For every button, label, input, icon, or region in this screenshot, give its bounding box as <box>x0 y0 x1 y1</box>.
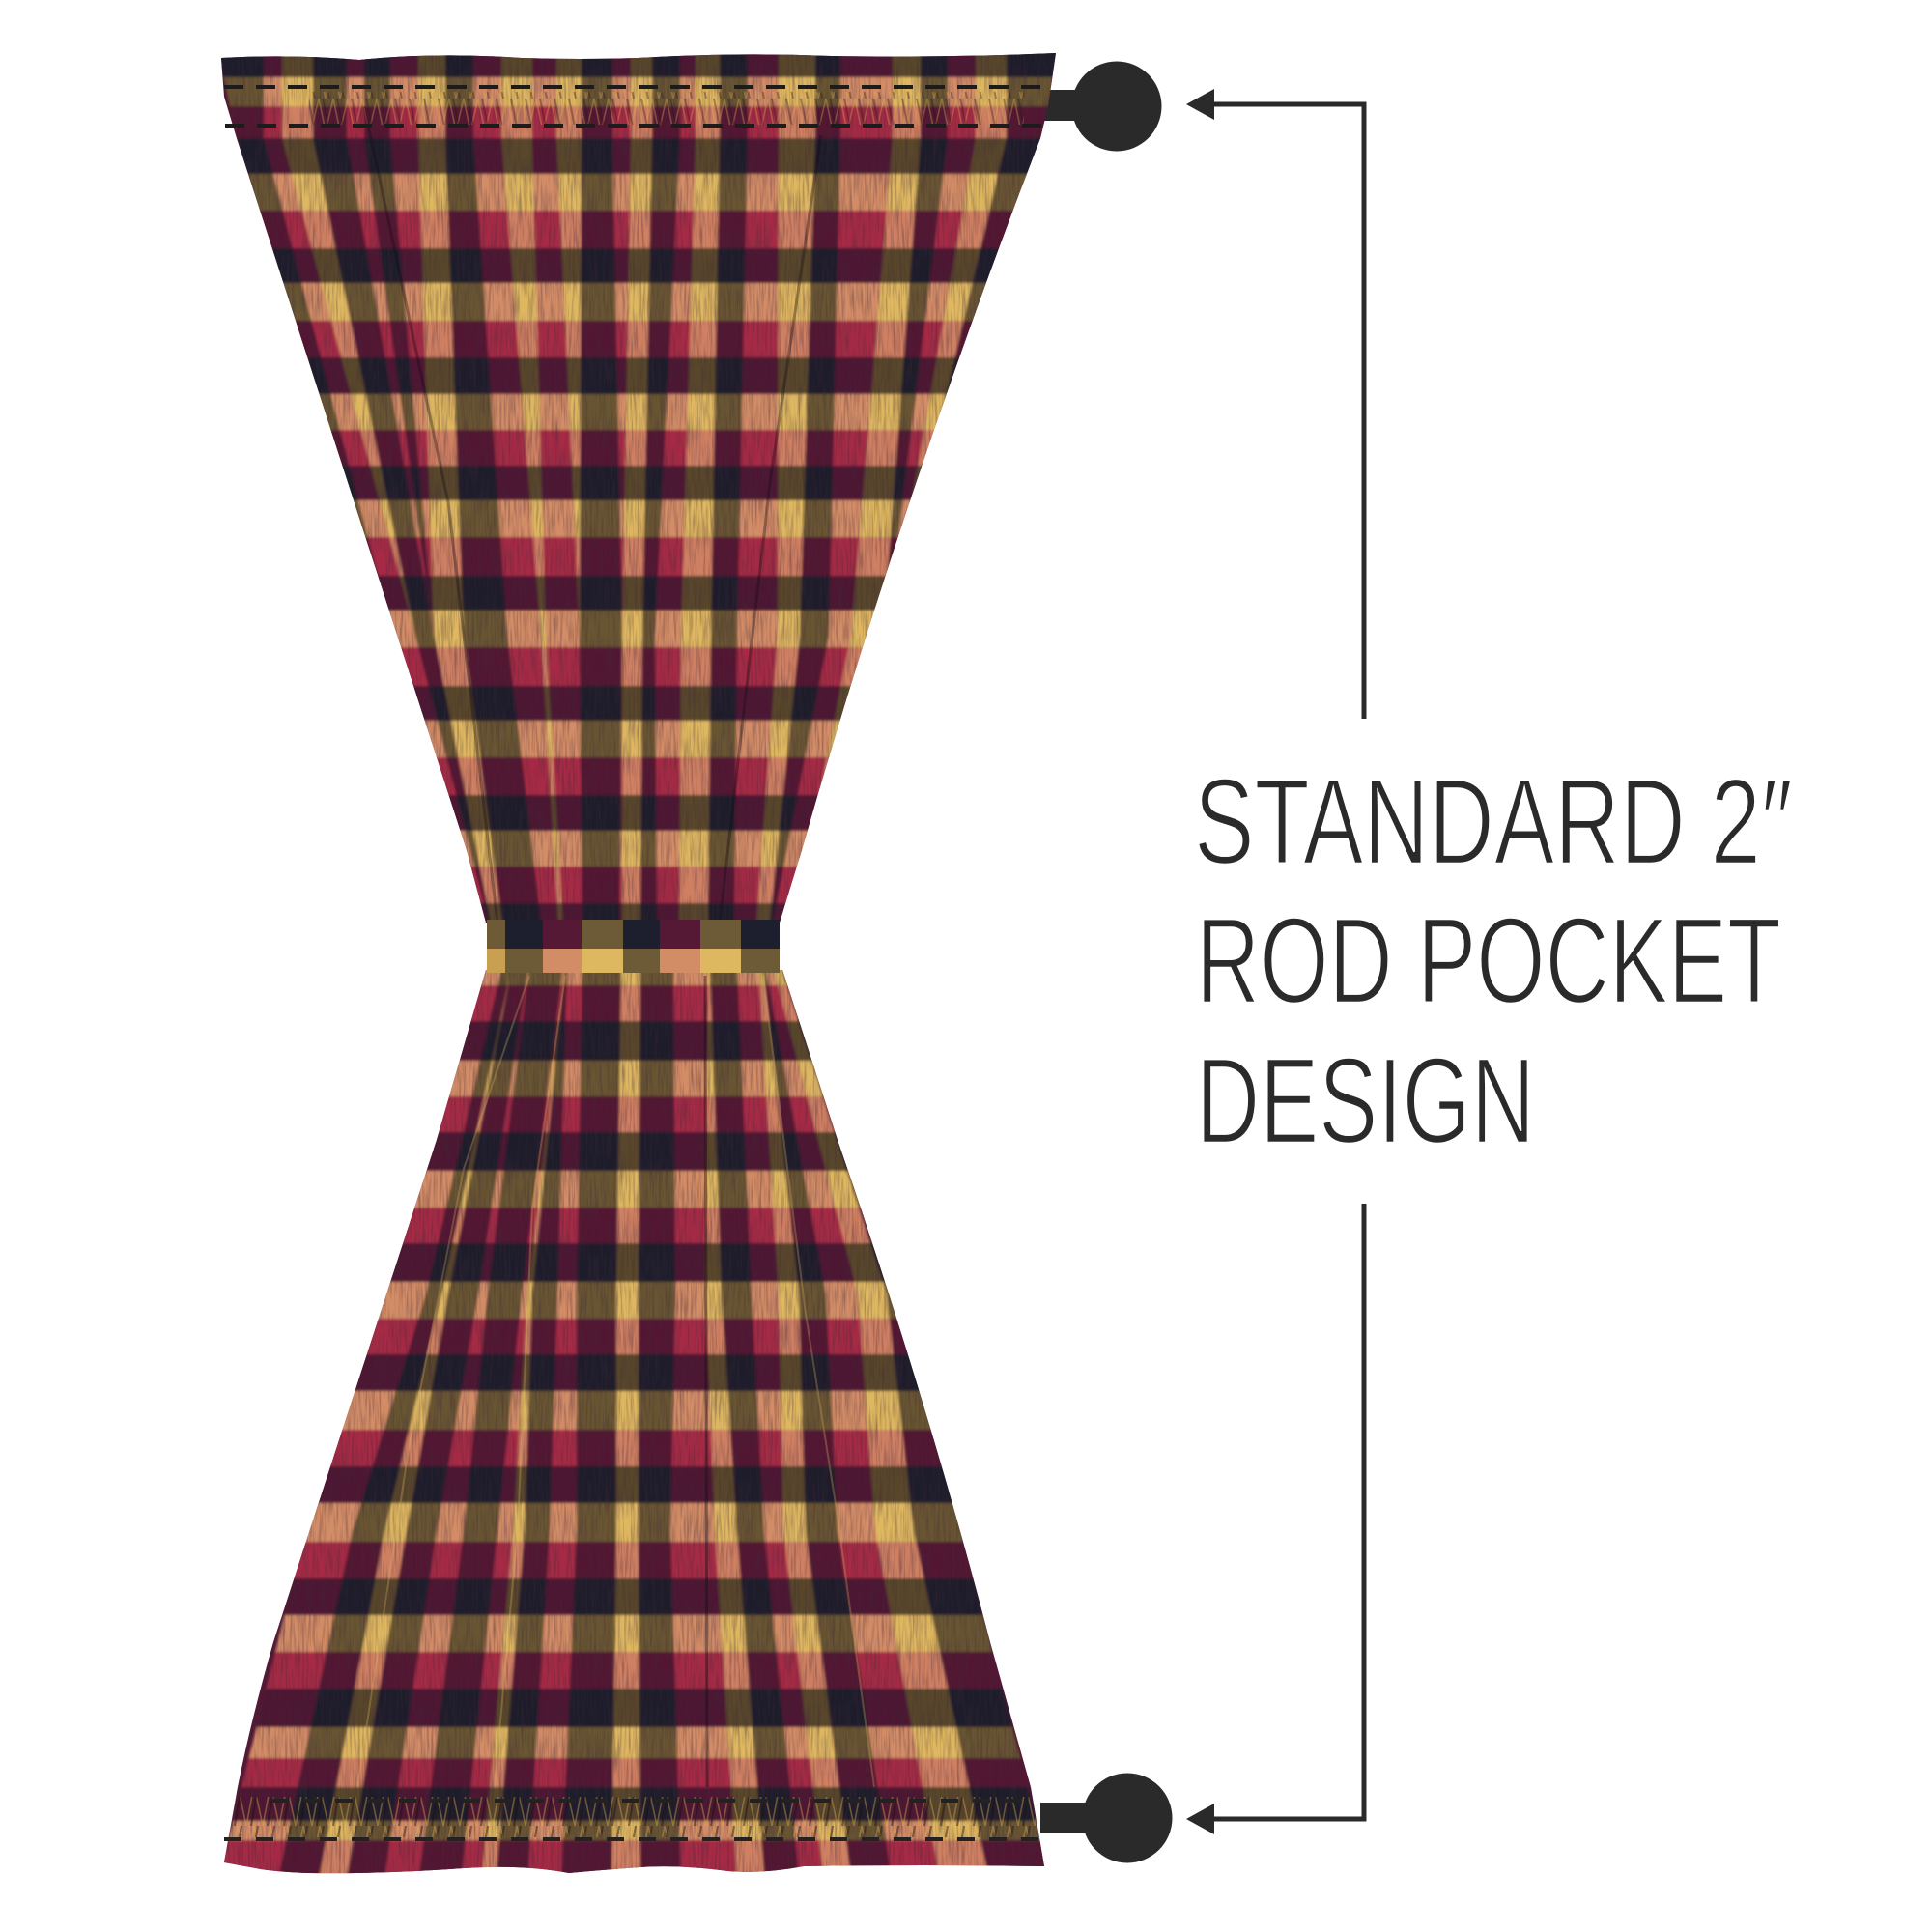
rod pocket stitching bottom <box>224 1801 1043 1839</box>
callout text: DESIGN <box>1196 1033 1535 1169</box>
rod pocket stitching top <box>224 87 1046 126</box>
lower curtain panel <box>193 966 1082 1884</box>
bottom curtain rod with finial <box>1040 1774 1173 1862</box>
bottom bracket arrow <box>1186 1204 1364 1834</box>
upper curtain panel <box>193 39 1082 927</box>
callout text <box>1194 753 1793 1169</box>
panel: plaid door curtain <box>193 39 1082 1884</box>
tie-back band <box>487 920 780 973</box>
top curtain rod with finial <box>1043 62 1161 151</box>
top bracket arrow <box>1186 89 1364 719</box>
